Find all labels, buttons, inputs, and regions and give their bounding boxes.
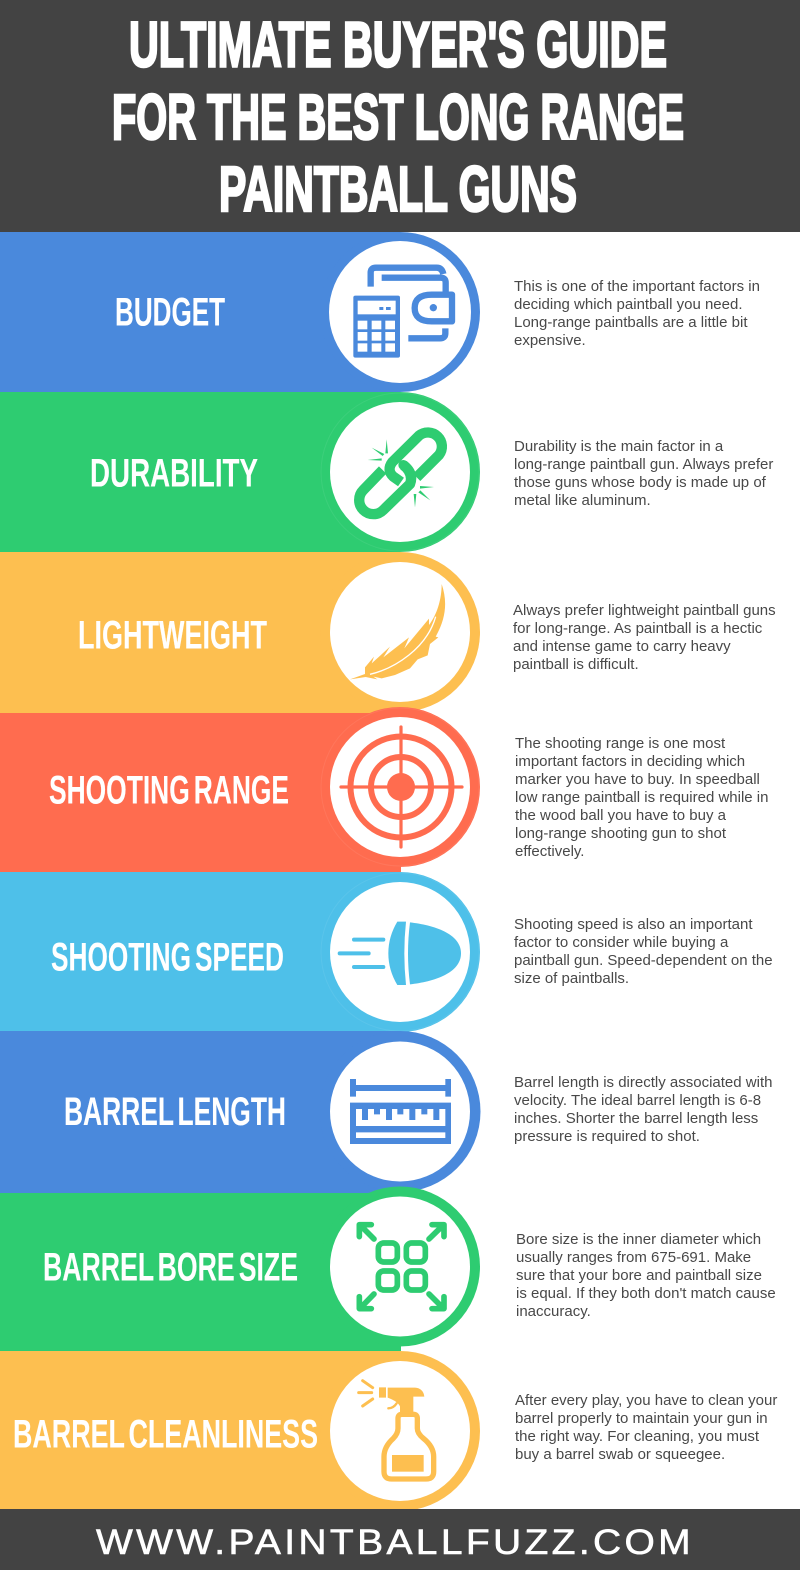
- heading: shooting speed: SHOOTING SPEED: [51, 936, 284, 980]
- description: shooting range: important factors in deciding which: [515, 753, 745, 770]
- heading: lightweight: LIGHTWEIGHT: [78, 614, 267, 658]
- description: budget: This is one of the important factors in: [514, 278, 760, 295]
- description: shooting range: low range paintball is required while in: [515, 789, 768, 806]
- description: shooting range: The shooting range is one most: [515, 735, 725, 752]
- description: barrel length: Barrel length is directly associated with: [514, 1074, 772, 1091]
- description: durability: long-range paintball gun. Always prefer: [514, 456, 773, 473]
- description: budget: Long-range paintballs are a little bit: [514, 314, 748, 331]
- panel: lightweight: [0, 552, 776, 713]
- description: barrel cleanliness: barrel properly to maintain your gun in: [515, 1410, 768, 1427]
- description: shooting range: long-range shooting gun to shot: [515, 825, 727, 842]
- panel: durability: [0, 392, 773, 552]
- title: PAINTBALL GUNS: [219, 153, 577, 225]
- panel: shooting speed: [0, 872, 773, 1032]
- description: budget: deciding which paintball you need.: [514, 296, 742, 313]
- icon: chain link: [359, 432, 442, 514]
- heading: budget: BUDGET: [115, 291, 225, 335]
- description: shooting speed: size of paintballs.: [514, 970, 629, 987]
- footer panel: [0, 1509, 800, 1570]
- description: lightweight: Always prefer lightweight paintball guns: [513, 602, 776, 619]
- description: barrel length: velocity. The ideal barrel length is 6-8: [514, 1092, 761, 1109]
- icon: expanding grid: [359, 1225, 444, 1309]
- description: lightweight: for long-range. As paintball is a hectic: [513, 620, 763, 637]
- description: durability: Durability is the main factor in a: [514, 438, 723, 455]
- description: budget: expensive.: [514, 332, 586, 349]
- panel: shooting range: [0, 707, 768, 872]
- panel: budget: [0, 232, 760, 392]
- heading: barrel bore size: BARREL BORE SIZE: [43, 1246, 298, 1290]
- description: barrel cleanliness: buy a barrel swab or squeegee.: [515, 1446, 725, 1463]
- title: [112, 8, 684, 225]
- panel: barrel cleanliness: [0, 1351, 777, 1511]
- description: shooting speed: factor to consider while buying a: [514, 934, 729, 951]
- description: lightweight: paintball is difficult.: [513, 656, 639, 673]
- description: barrel cleanliness: After every play, you have to clean your: [515, 1392, 777, 1409]
- icon: ruler: [350, 1079, 451, 1144]
- description: shooting speed: Shooting speed is also an important: [514, 916, 752, 933]
- heading: barrel length: BARREL LENGTH: [64, 1090, 286, 1134]
- description: shooting speed: paintball gun. Speed-dependent on the: [514, 952, 773, 969]
- description: barrel cleanliness: the right way. For cleaning, you must: [515, 1428, 760, 1445]
- description: durability: those guns whose body is made up of: [514, 474, 767, 491]
- icon: feather: [350, 584, 445, 679]
- description: shooting range: effectively.: [515, 843, 584, 860]
- heading: barrel cleanliness: BARREL CLEANLINESS: [13, 1413, 318, 1457]
- description: barrel length: inches. Shorter the barrel length less: [514, 1110, 758, 1127]
- description: barrel length: pressure is required to shot.: [514, 1128, 700, 1145]
- description: barrel bore size: is equal. If they both don't match cause: [516, 1285, 776, 1302]
- heading: durability: DURABILITY: [90, 452, 258, 496]
- description: shooting range: the wood ball you have to buy a: [515, 807, 727, 824]
- header panel: [0, 0, 800, 232]
- heading: shooting range: SHOOTING RANGE: [49, 769, 289, 813]
- panel: barrel length: [0, 1031, 772, 1193]
- description: lightweight: and intense game to carry heavy: [513, 638, 731, 655]
- description: barrel bore size: usually ranges from 675-691. Make: [516, 1249, 751, 1266]
- panel: barrel bore size: [0, 1186, 776, 1351]
- description: barrel bore size: Bore size is the inner diameter which: [516, 1231, 761, 1248]
- description: durability: metal like aluminum.: [514, 492, 651, 509]
- icon: target: [341, 727, 462, 847]
- icon: spray bottle: [359, 1381, 434, 1479]
- icon: wallet and calculator: [353, 268, 452, 358]
- description: shooting range: marker you have to buy. In speedball: [515, 771, 760, 788]
- description: barrel bore size: inaccuracy.: [516, 1303, 591, 1320]
- description: barrel bore size: sure that your bore and paintball size: [516, 1267, 762, 1284]
- footer website address: WWW.PAINTBALLFUZZ.COM: [96, 1523, 694, 1562]
- icon: bullet: [340, 922, 461, 985]
